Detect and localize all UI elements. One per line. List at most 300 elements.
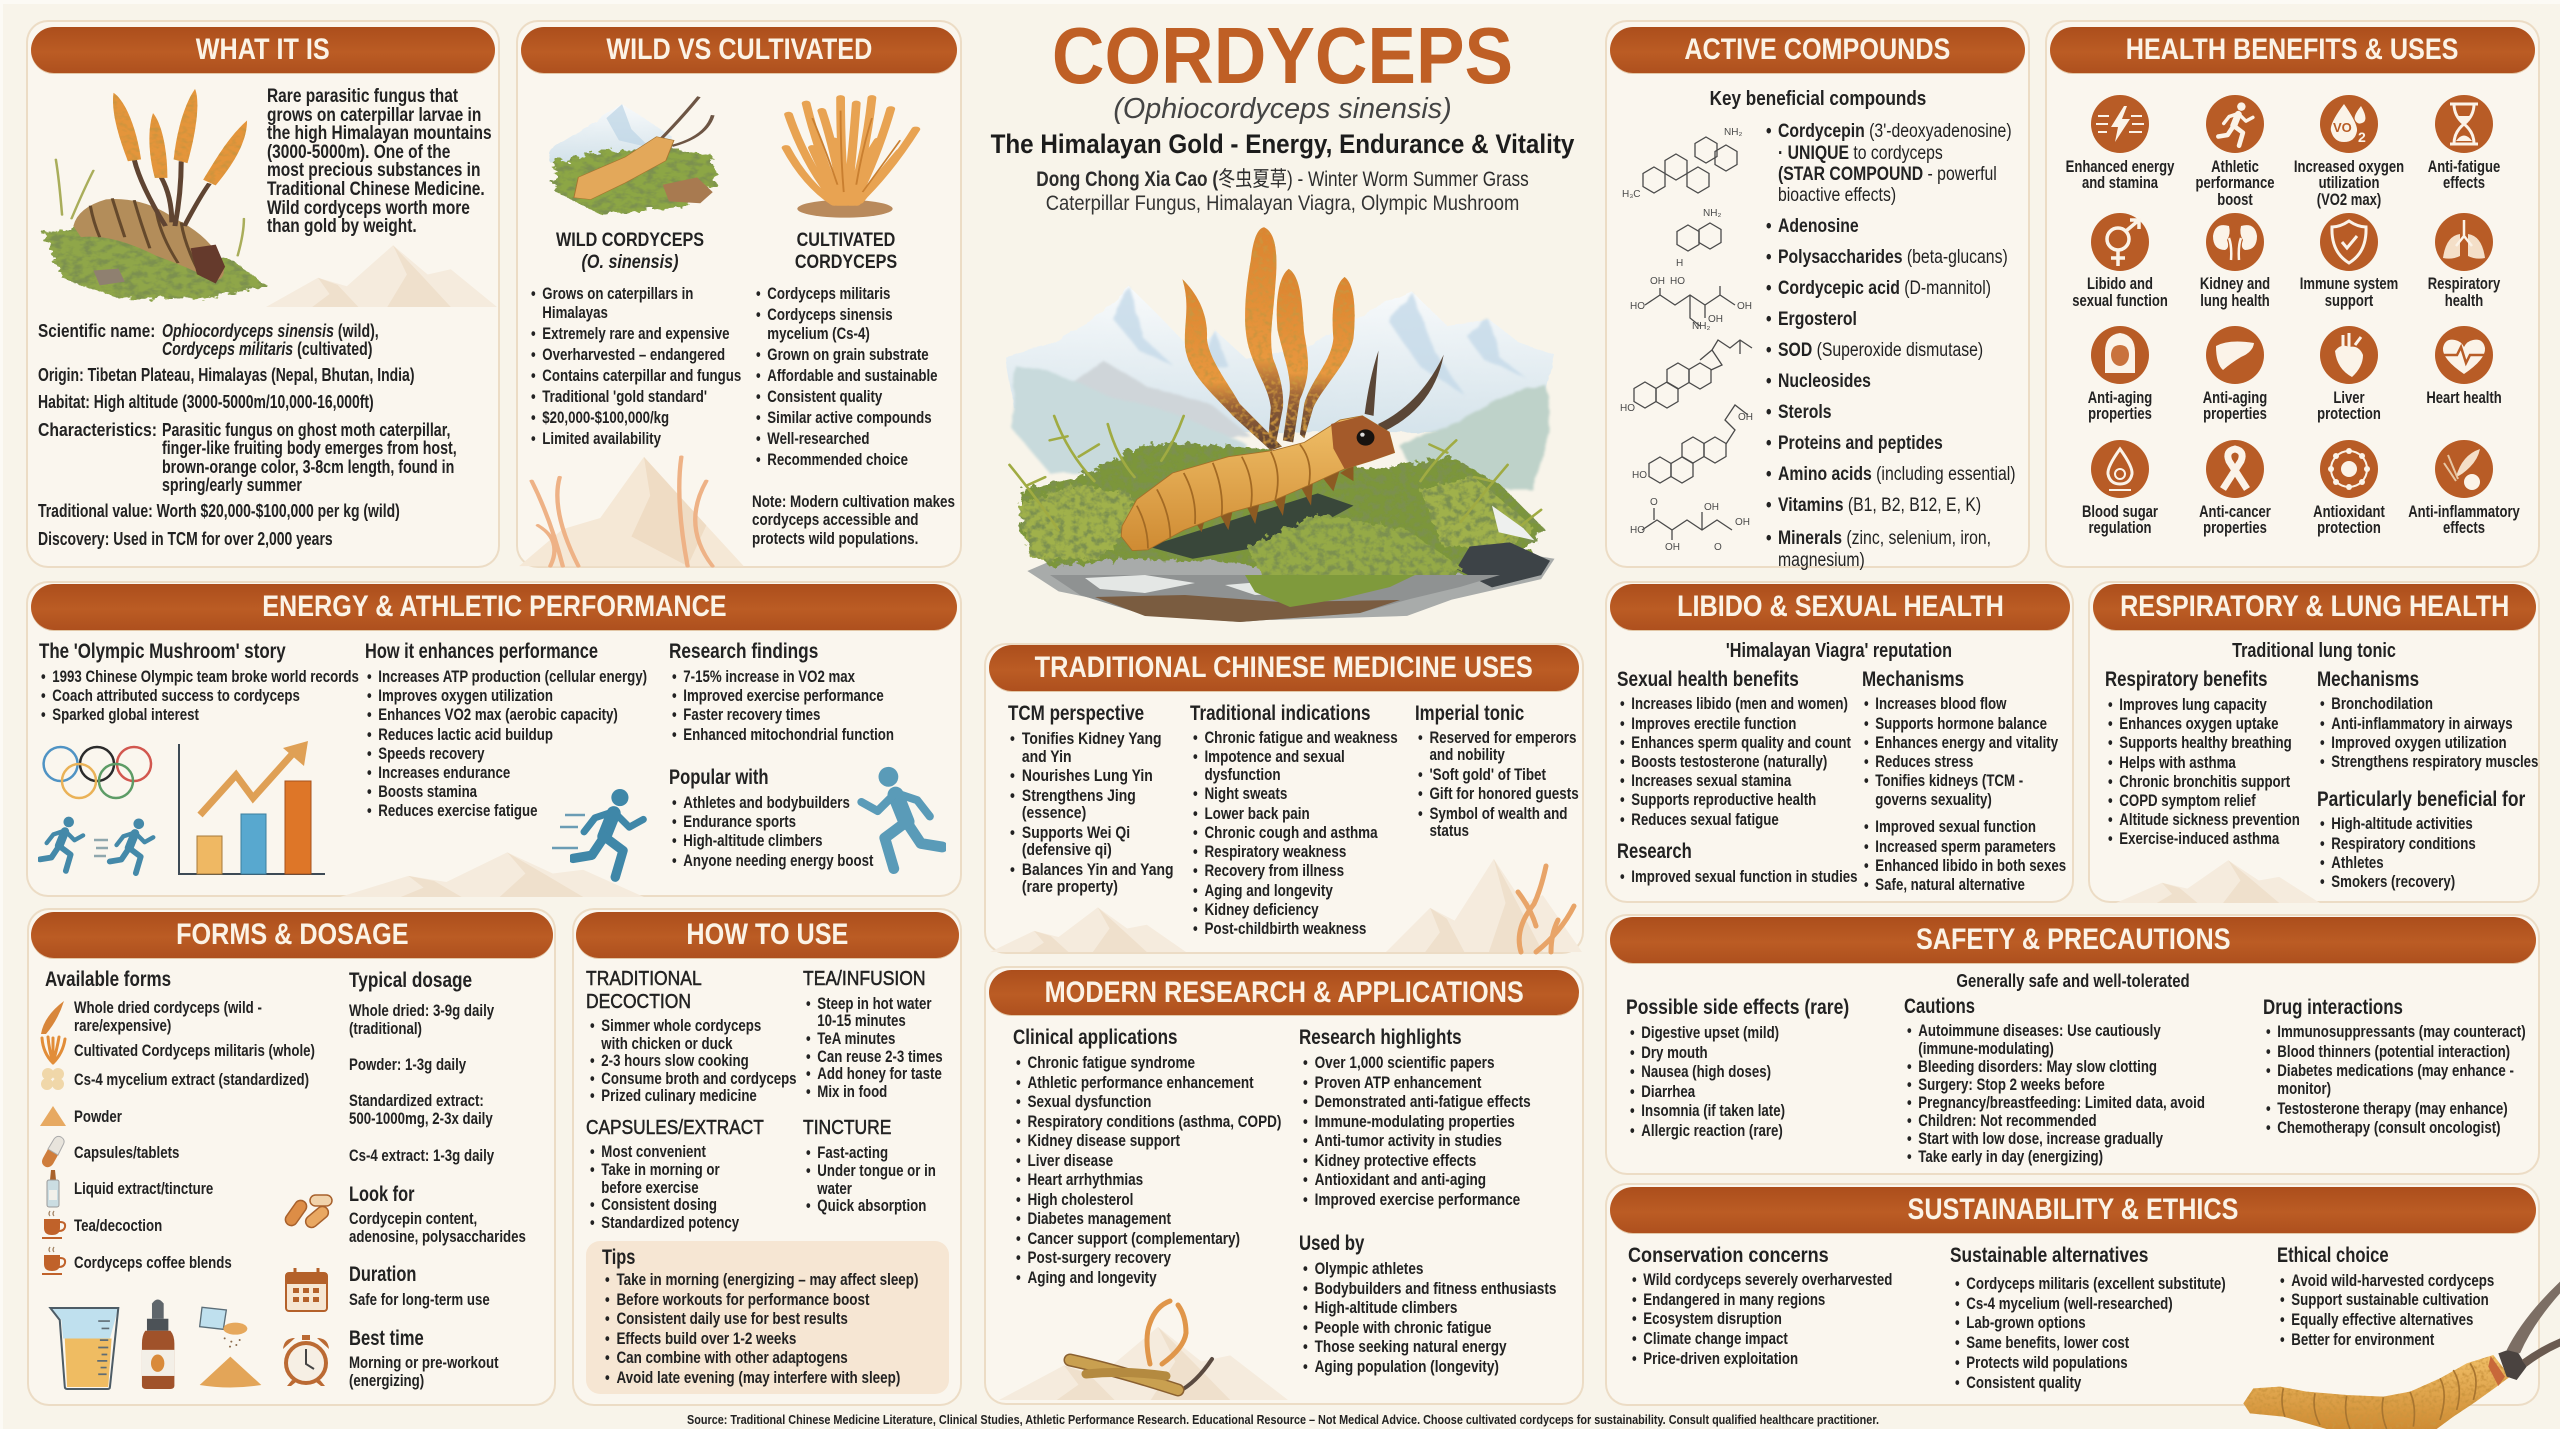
- list: used by: Those seeking natural energy: [1314, 1337, 1506, 1356]
- benefit: heart: Heart health: [2426, 388, 2502, 406]
- list: respiratory benefits: Supports healthy breathing: [2119, 733, 2292, 752]
- compound list: Cordycepin (3'-deoxyadenosine): [1778, 121, 2012, 142]
- list: TCM perspective: Nourishes Lung Yin: [1022, 766, 1153, 785]
- form: mycelium: Cs-4 mycelium extract (standardized): [74, 1070, 309, 1088]
- tips list: Consistent daily use for best results: [616, 1309, 848, 1328]
- note: cordyceps accessible and: [752, 510, 918, 529]
- decorative mountains: [266, 246, 496, 307]
- list: indications: Respiratory weakness: [1204, 842, 1346, 861]
- list: respiratory benefits: [2108, 695, 2300, 849]
- label: wild cordyceps: [556, 230, 704, 273]
- dose: Cs-4: Cs-4 extract: 1-3g daily: [349, 1146, 494, 1165]
- list: cultivated: mycelium (Cs-4): [767, 324, 870, 342]
- benefit: anti-cancer ribbon: Anti-cancer: [2199, 502, 2271, 520]
- list: cultivated: Well-researched: [767, 428, 870, 448]
- list: tincture: Fast-acting: [817, 1143, 888, 1162]
- list: how it enhances: Speeds recovery: [378, 744, 484, 763]
- benefit: anti-fatigue: [2428, 95, 2500, 192]
- list: used by: Olympic athletes: [1314, 1259, 1423, 1278]
- list: alternatives: Same benefits, lower cost: [1966, 1333, 2129, 1352]
- list: mechanisms: Enhances energy and vitality: [1875, 733, 2058, 752]
- list: indications: dysfunction: [1204, 765, 1281, 784]
- list: wild: Himalayas: [542, 302, 608, 322]
- molecule: cordycepin: H₃C: [1622, 189, 1641, 200]
- benefit: blood sugar: Blood sugar: [2082, 502, 2158, 520]
- benefit: energy: and stamina: [2082, 174, 2158, 192]
- dose: standardized: 500-1000mg, 2-3x daily: [349, 1109, 493, 1128]
- list: research results: Safe, natural alternative: [1875, 875, 2025, 894]
- heading: side effects: Possible side effects (rare): [1626, 996, 1849, 1019]
- molecule: triterpene: [1632, 405, 1753, 483]
- list: cautions: Surgery: Stop 2 weeks before: [1918, 1075, 2105, 1094]
- molecule: cordycepic acid: HO: [1630, 301, 1645, 312]
- description: most precious substances in: [267, 160, 480, 181]
- list: highlights: [1303, 1053, 1530, 1209]
- compound list: (STAR COMPOUND - powerful: [1778, 164, 1997, 185]
- compound list: Nucleosides: [1778, 371, 1871, 392]
- heading: olympic story: The 'Olympic Mushroom' story: [39, 640, 286, 663]
- compound list: Amino acids (including essential): [1778, 464, 2016, 485]
- molecule: amino acid: O: [1650, 497, 1658, 508]
- benefit: immune: [2300, 213, 2398, 310]
- list: conservation: [1632, 1270, 1892, 1369]
- icon: whole dried: [38, 998, 68, 1038]
- list: imperial tonic: [1418, 729, 1579, 842]
- icon: pills: [284, 1193, 332, 1233]
- list: cautions: Pregnancy/breastfeeding: Limited data, avoid: [1918, 1093, 2205, 1112]
- heading: [1610, 27, 2025, 73]
- benefit: heart: [2426, 326, 2502, 406]
- panel: traditional chinese medicine uses: [984, 643, 1584, 954]
- list: clinical: Aging and longevity: [1028, 1268, 1157, 1286]
- list: popular with: Endurance sports: [683, 812, 796, 831]
- benefit: antioxidant: protection: [2317, 519, 2381, 537]
- benefit: athletic performance: Athletic: [2211, 158, 2259, 176]
- list: ethical: [2280, 1271, 2494, 1349]
- form: cultivated: Cultivated Cordyceps militaris (whole): [74, 1040, 315, 1060]
- list: tincture: Under tongue or in: [817, 1161, 936, 1180]
- list: indications: Aging and longevity: [1204, 881, 1333, 900]
- icon: alarm clock: [281, 1335, 331, 1387]
- benefit: kidney and lung: Kidney and: [2200, 275, 2270, 293]
- subheading: Key beneficial compounds: [1709, 88, 1926, 110]
- benefit: anti-cancer ribbon: properties: [2203, 519, 2267, 537]
- heading: WILD VS CULTIVATED: [606, 33, 872, 66]
- list: respiratory benefits: COPD symptom relief: [2119, 791, 2256, 810]
- list: cultivated: Recommended choice: [767, 450, 908, 468]
- heading: [31, 912, 553, 958]
- list: research results: Enhanced libido in both sexes: [1875, 856, 2066, 875]
- list: wild: Overharvested – endangered: [542, 344, 725, 364]
- bar chart with rising arrow: [176, 741, 331, 877]
- benefit: anti-aging liver: [2203, 326, 2267, 423]
- benefit: immune: support: [2325, 292, 2373, 310]
- tips list: Take in morning (energizing – may affect sleep): [616, 1270, 918, 1289]
- illustration: wild cordyceps: [549, 96, 719, 216]
- form: capsules: Capsules/tablets: [74, 1142, 179, 1162]
- tips heading: Tips: [602, 1246, 635, 1269]
- list: benefits: Enhances sperm quality and count: [1631, 733, 1851, 752]
- heading: duration: Duration: [349, 1263, 416, 1286]
- benefit: kidney and lung: lung health: [2200, 292, 2270, 310]
- list: used by: Aging population (longevity): [1314, 1356, 1499, 1376]
- label: cultivated cordyceps: CULTIVATED: [797, 230, 895, 251]
- molecule: adenosine: NH₂: [1703, 208, 1721, 219]
- heading: MODERN RESEARCH & APPLICATIONS: [1044, 976, 1524, 1009]
- heading: sustainable alternatives: Sustainable alternatives: [1950, 1244, 2148, 1267]
- list: cautions: Take early in day (energizing): [1918, 1147, 2103, 1166]
- description: grows on caterpillar larvae in: [267, 105, 481, 126]
- benefit: antioxidant: [2313, 440, 2385, 537]
- benefit: athletic performance: performance: [2196, 174, 2274, 192]
- list: indications: Lower back pain: [1204, 804, 1310, 823]
- list: mechanisms: Supports hormone balance: [1875, 714, 2047, 733]
- list: research findings: Faster recovery times: [683, 705, 820, 724]
- source footer: Source: Traditional Chinese Medicine Literature, Clinical Studies, Athletic Performance Research. Educational Resource – Not Medical Advice. Choose cultivated cordyceps for sustainability. Consult qualified healthcare practitioner.: [687, 1412, 1879, 1427]
- list: clinical: Sexual dysfunction: [1028, 1092, 1151, 1111]
- heading: look for: Look for: [349, 1182, 415, 1206]
- heading: capsules: CAPSULES/EXTRACT: [586, 1117, 764, 1139]
- molecule: cordycepin: NH₂: [1724, 127, 1742, 138]
- list: tea: [806, 995, 943, 1100]
- list: mechanisms: Improved oxygen utilization: [2331, 733, 2507, 752]
- decorative mountains: [2116, 858, 2320, 903]
- fact: characteristics label: Characteristics:: [38, 420, 157, 440]
- list: respiratory benefits: Improves lung capacity: [2119, 695, 2267, 714]
- heading: HOW TO USE: [687, 918, 848, 951]
- list: mechanisms: Reduces stress: [1875, 752, 1973, 771]
- compound list: Vitamins (B1, B2, B12, E, K): [1778, 495, 1981, 516]
- molecule: cordycepic acid: OH: [1737, 301, 1752, 312]
- form: whole dried: rare/expensive): [74, 1016, 171, 1035]
- fact: scientific name label: Scientific name:: [38, 320, 155, 340]
- list: particularly beneficial: [2320, 814, 2476, 891]
- molecule: cordycepic acid: [1630, 276, 1752, 332]
- list: alternatives: Cs-4 mycelium (well-researched): [1966, 1294, 2173, 1313]
- list: highlights: Over 1,000 scientific papers: [1314, 1053, 1494, 1072]
- dose: whole dried: Whole dried: 3-9g daily: [349, 1001, 494, 1020]
- list: highlights: Anti-tumor activity in studies: [1314, 1131, 1502, 1150]
- benefit: oxygen: Increased oxygen: [2294, 158, 2404, 176]
- list: research findings: 7-15% increase in VO2 max: [683, 667, 855, 686]
- tips box: [586, 1241, 949, 1394]
- benefit: liver protection heart: Liver: [2333, 388, 2365, 406]
- measuring jug: [48, 1305, 120, 1392]
- molecule: amino acid: [1630, 497, 1750, 553]
- list: TCM perspective: (defensive qi): [1022, 840, 1112, 859]
- list: cautions: [1907, 1022, 2205, 1166]
- form: tea: Tea/decoction: [74, 1216, 162, 1235]
- duration text: Safe for long-term use: [349, 1290, 490, 1309]
- label: cultivated cordyceps: CORDYCEPS: [795, 252, 897, 273]
- list: capsules: Most convenient: [601, 1142, 706, 1161]
- benefit: libido: Libido and: [2087, 275, 2153, 293]
- list: particularly beneficial: Smokers (recovery): [2331, 872, 2455, 891]
- heading: used by: Used by: [1299, 1232, 1364, 1255]
- molecule: amino acid: OH: [1665, 542, 1680, 553]
- heading: mechanisms: Mechanisms: [1862, 668, 1964, 691]
- heading: [1610, 1187, 2536, 1233]
- benefit: anti-cancer ribbon: [2199, 440, 2271, 537]
- heading: [2093, 584, 2536, 630]
- heading: conservation: Conservation concerns: [1628, 1244, 1829, 1267]
- list: how it enhances: Improves oxygen utilization: [378, 686, 553, 705]
- heading: [521, 27, 957, 73]
- description: Wild cordyceps worth more: [267, 198, 470, 219]
- molecule: adenosine: [1676, 208, 1721, 269]
- benefit: oxygen: utilization: [2319, 174, 2379, 192]
- tips list: Effects build over 1-2 weeks: [616, 1328, 796, 1348]
- list: indications: [1193, 729, 1398, 940]
- look for text: adenosine, polysaccharides: [349, 1226, 526, 1246]
- molecule: cordycepic acid: OH: [1708, 314, 1723, 325]
- list: olympic story: Sparked global interest: [52, 705, 199, 724]
- molecule: triterpene: OH: [1738, 412, 1753, 423]
- benefit: oxygen: 2: [2358, 129, 2366, 145]
- list: highlights: Proven ATP enhancement: [1314, 1072, 1481, 1092]
- molecule: amino acid: OH: [1735, 517, 1750, 528]
- panel: libido and sexual health: [1605, 581, 2074, 903]
- list: conservation: Wild cordyceps severely overharvested: [1643, 1270, 1892, 1289]
- list: imperial tonic: and nobility: [1429, 745, 1505, 764]
- list: indications: Kidney deficiency: [1204, 900, 1319, 919]
- list: highlights: Improved exercise performance: [1314, 1190, 1520, 1208]
- heading: imperial tonic: Imperial tonic: [1415, 702, 1524, 725]
- list: conservation: Price-driven exploitation: [1643, 1349, 1798, 1368]
- molecule: ergosterol: HO: [1620, 403, 1635, 414]
- list: drug interactions: Diabetes medications (may enhance -: [2277, 1061, 2514, 1080]
- list: side effects: Allergic reaction (rare): [1641, 1120, 1783, 1140]
- icon: tea: [39, 1210, 69, 1240]
- best time text: [349, 1354, 499, 1390]
- list: capsules: Take in morning or: [601, 1160, 720, 1179]
- list: olympic story: [41, 667, 359, 724]
- panel: forms and dosage: [27, 908, 556, 1406]
- list: wild: [531, 284, 741, 448]
- hero illustration: cordyceps on caterpillar with mountains: [1006, 227, 1554, 620]
- list: popular with: [672, 793, 874, 870]
- list: mechanisms: governs sexuality): [1875, 790, 1992, 809]
- list: clinical: [1016, 1053, 1281, 1287]
- benefit: anti-aging face: [2088, 326, 2152, 423]
- tips list: Before workouts for performance boost: [616, 1290, 869, 1308]
- list: tincture: water: [817, 1179, 852, 1198]
- list: tincture: [806, 1144, 936, 1215]
- benefit: immune: Immune system: [2300, 275, 2398, 293]
- fact: characteristics value: finger-like fruiting body emerges from host,: [162, 438, 457, 458]
- list: clinical: Post-surgery recovery: [1028, 1248, 1171, 1267]
- subheading: Traditional lung tonic: [2232, 640, 2396, 662]
- heading: RESPIRATORY & LUNG HEALTH: [2120, 590, 2509, 623]
- list: mechanisms: Tonifies kidneys (TCM -: [1875, 771, 2023, 790]
- list: capsules: [590, 1143, 739, 1232]
- list: capsules: before exercise: [601, 1178, 699, 1197]
- list: drug interactions: Immunosuppressants (may counteract): [2277, 1022, 2526, 1041]
- list: research findings: [672, 667, 894, 744]
- small runners: [38, 815, 160, 877]
- list: alternatives: [1955, 1274, 2226, 1392]
- benefit: energy: Enhanced energy: [2066, 158, 2174, 176]
- list: mechanisms: [2320, 694, 2538, 771]
- molecule: amino acid: OH: [1704, 502, 1719, 513]
- list: cautions: Start with low dose, increase gradually: [1918, 1129, 2163, 1148]
- list: drug interactions: monitor): [2277, 1079, 2331, 1098]
- list: particularly beneficial: Respiratory conditions: [2331, 834, 2476, 853]
- list: highlights: Demonstrated anti-fatigue effects: [1314, 1092, 1530, 1111]
- list: used by: People with chronic fatigue: [1314, 1318, 1491, 1336]
- panel: wild vs cultivated: [516, 20, 962, 568]
- heading: [989, 645, 1579, 691]
- look for text: Cordycepin content,: [349, 1209, 477, 1228]
- heading: [31, 584, 957, 630]
- list: cultivated: Cordyceps sinensis: [767, 304, 893, 324]
- heading: LIBIDO & SEXUAL HEALTH: [1677, 590, 2003, 623]
- icon: calendar: [285, 1268, 328, 1312]
- benefit: anti-inflammatory: [2408, 440, 2520, 537]
- note: [752, 492, 955, 548]
- molecule: cordycepic acid: NH₂: [1692, 321, 1710, 332]
- benefit: liver protection heart: [2317, 326, 2381, 423]
- list: respiratory benefits: Chronic bronchitis support: [2119, 772, 2290, 791]
- list: research: Improved sexual function in studies: [1631, 867, 1858, 886]
- list: respiratory benefits: Altitude sickness prevention: [2119, 810, 2300, 829]
- heading: ethical choice: Ethical choice: [2277, 1244, 2389, 1267]
- compound list: Ergosterol: [1778, 309, 1857, 330]
- tagline: The Himalayan Gold - Energy, Endurance & Vitality: [991, 129, 1574, 159]
- list: cultivated: Consistent quality: [767, 386, 882, 406]
- list: imperial tonic: Gift for honored guests: [1429, 784, 1579, 803]
- list: indications: Impotence and sexual: [1204, 747, 1345, 766]
- dose: standardized: [349, 1092, 493, 1128]
- list: cautions: Children: Not recommended: [1918, 1111, 2097, 1130]
- big runner with speed lines: [550, 787, 675, 883]
- list: benefits: Reduces sexual fatigue: [1631, 810, 1779, 829]
- fact: discovery: Discovery: Used in TCM for over 2,000 years: [38, 529, 333, 549]
- list: clinical: Kidney disease support: [1028, 1131, 1180, 1150]
- list: research results: Increased sperm parameters: [1875, 837, 2056, 856]
- list: wild: Extremely rare and expensive: [542, 324, 730, 342]
- description: [267, 86, 492, 237]
- list: decoction: Prized culinary medicine: [601, 1086, 757, 1105]
- list: tea: Can reuse 2-3 times: [817, 1047, 943, 1066]
- list: TCM perspective: (essence): [1022, 803, 1086, 822]
- heading: traditional indications: Traditional indications: [1190, 702, 1371, 725]
- list: tea: Steep in hot water: [817, 994, 932, 1013]
- heading: [1610, 917, 2536, 963]
- icon: mycelium: [39, 1065, 67, 1093]
- list: tea: 10-15 minutes: [817, 1011, 906, 1030]
- list: research results: [1864, 817, 2066, 894]
- compound list: · UNIQUE to cordyceps: [1778, 143, 1943, 164]
- form: whole dried: Whole dried cordyceps (wild -: [74, 998, 262, 1017]
- list: tea: Mix in food: [817, 1082, 887, 1101]
- description: than gold by weight.: [267, 216, 417, 237]
- description: (3000-5000m). One of the: [267, 142, 450, 163]
- list: side effects: Dry mouth: [1641, 1042, 1708, 1062]
- list: indications: Night sweats: [1204, 784, 1287, 803]
- benefit: liver protection heart: protection: [2317, 405, 2381, 423]
- list: ethical: Avoid wild-harvested cordyceps: [2291, 1271, 2494, 1290]
- icon: cultivated: [39, 1035, 67, 1065]
- list: olympic story: 1993 Chinese Olympic team broke world records: [52, 667, 359, 686]
- list: mechanisms: Increases blood flow: [1875, 694, 2006, 713]
- compound list: bioactive effects): [1778, 185, 1896, 206]
- molecule: triterpene: HO: [1632, 470, 1647, 481]
- list: imperial tonic: 'Soft gold' of Tibet: [1429, 765, 1546, 784]
- benefit: anti-inflammatory: Anti-inflammatory: [2408, 502, 2520, 520]
- form: coffee: Cordyceps coffee blends: [74, 1252, 232, 1272]
- heading: research: Research: [1617, 840, 1692, 863]
- tips list: Can combine with other adaptogens: [616, 1348, 848, 1367]
- list: clinical: Diabetes management: [1028, 1209, 1171, 1228]
- heading: tea infusion: TEA/INFUSION: [803, 968, 926, 990]
- decorative mountain and strands: [520, 456, 744, 568]
- list: highlights: Kidney protective effects: [1314, 1150, 1476, 1170]
- molecule: amino acid: O: [1714, 542, 1722, 553]
- list: cultivated: Cordyceps militaris: [767, 284, 890, 302]
- heading: [31, 27, 495, 73]
- scientific name: (Ophiocordyceps sinensis): [1113, 93, 1452, 125]
- list: how it enhances: Increases ATP production (cellular energy): [378, 667, 647, 686]
- list: cautions: (immune-modulating): [1918, 1039, 2054, 1058]
- list: drug interactions: Testosterone therapy (may enhance): [2277, 1099, 2508, 1118]
- heading: available forms: Available forms: [45, 968, 171, 991]
- benefit: anti-inflammatory: effects: [2443, 519, 2485, 537]
- illustration: caterpillar with four stalks: [40, 89, 268, 302]
- heading: TCM perspective: TCM perspective: [1008, 702, 1144, 725]
- list: wild: Traditional 'gold standard': [542, 386, 707, 406]
- list: research results: Improved sexual function: [1875, 817, 2036, 836]
- list: popular with: Athletes and bodybuilders: [683, 793, 850, 812]
- list: tea: Add honey for taste: [817, 1064, 942, 1083]
- dose: powder: Powder: 1-3g daily: [349, 1055, 466, 1074]
- heading: research findings: Research findings: [669, 640, 818, 663]
- fact: origin: Origin: Tibetan Plateau, Himalayas (Nepal, Bhutan, India): [38, 365, 414, 385]
- icon: capsule: [41, 1136, 65, 1168]
- list: clinical: Athletic performance enhancement: [1028, 1072, 1254, 1092]
- list: decoction: Consume broth and cordyceps: [601, 1069, 797, 1088]
- list: cautions: Bleeding disorders: May slow clotting: [1918, 1057, 2157, 1076]
- list: conservation: Endangered in many regions: [1643, 1290, 1825, 1309]
- decorative mountains: [999, 1323, 1288, 1400]
- heading: tincture: TINCTURE: [803, 1117, 891, 1139]
- benefit: oxygen: VO: [2333, 120, 2352, 135]
- benefit: oxygen: [2294, 95, 2404, 209]
- tips list: Avoid late evening (may interfere with sleep): [616, 1368, 900, 1386]
- list: highlights: Antioxidant and anti-aging: [1314, 1170, 1486, 1189]
- list: mechanisms: Strengthens respiratory muscles: [2331, 752, 2538, 771]
- heading: typical dosage: Typical dosage: [349, 969, 472, 992]
- panel: how to use: [572, 908, 962, 1406]
- list: respiratory benefits: Enhances oxygen uptake: [2119, 714, 2278, 733]
- list: ethical: Equally effective alternatives: [2291, 1310, 2473, 1329]
- fact: scientific name value: [162, 320, 379, 359]
- subheading: Generally safe and well-tolerated: [1956, 971, 2189, 991]
- fact: characteristics value: Parasitic fungus on ghost moth caterpillar,: [162, 420, 450, 440]
- best time text: (energizing): [349, 1371, 424, 1390]
- list: TCM perspective: Strengthens Jing: [1022, 786, 1136, 805]
- dried cordyceps specimen: [1066, 1298, 1214, 1397]
- list: conservation: Ecosystem disruption: [1643, 1309, 1782, 1328]
- dose: whole dried: [349, 1002, 494, 1038]
- heading: WHAT IT IS: [196, 33, 330, 66]
- list: benefits: Increases libido (men and women): [1631, 694, 1848, 713]
- panel: safety and precautions: [1605, 914, 2540, 1175]
- benefit: antioxidant: Antioxidant: [2313, 502, 2385, 520]
- description: Rare parasitic fungus that: [267, 86, 458, 107]
- heading: SUSTAINABILITY & ETHICS: [1908, 1193, 2238, 1226]
- benefit: libido: sexual function: [2072, 292, 2168, 310]
